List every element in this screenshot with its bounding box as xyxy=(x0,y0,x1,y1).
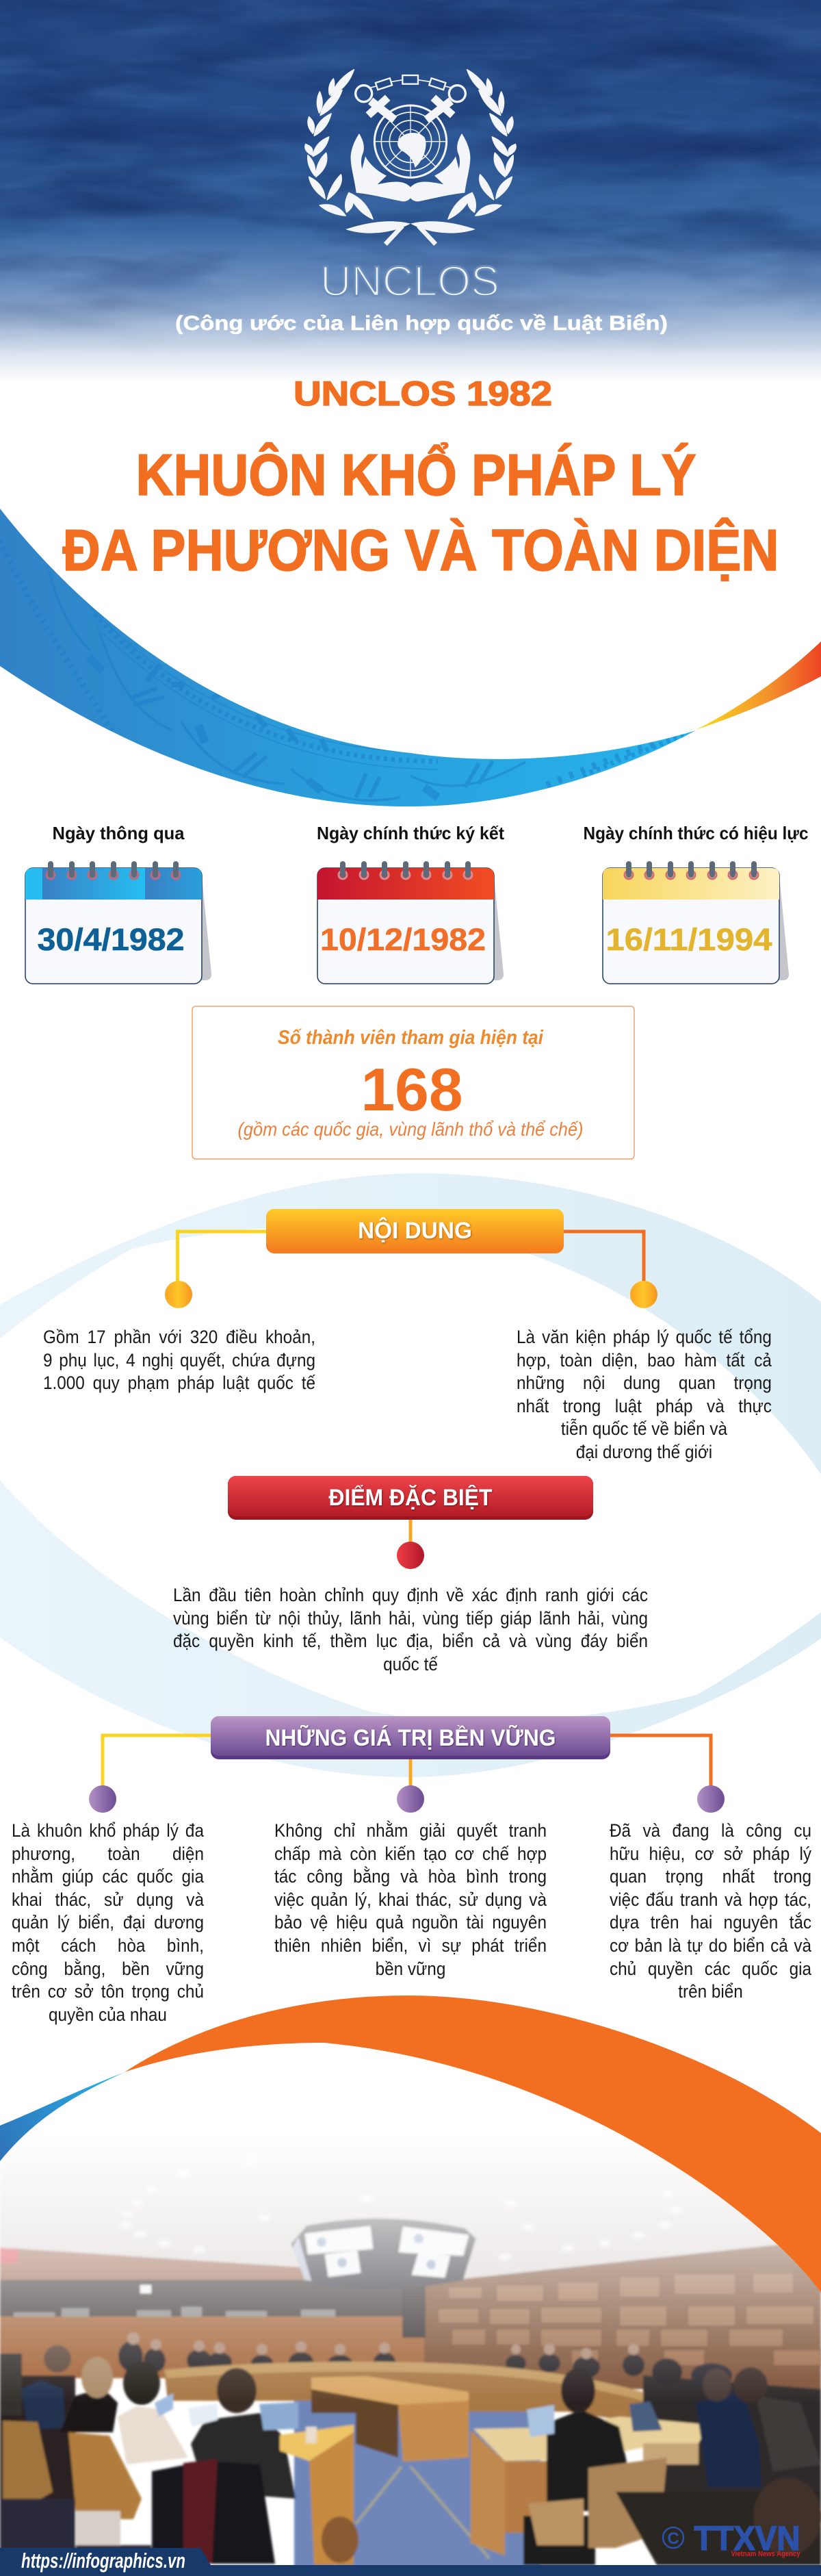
text block: value right: quan trọng nhất trong xyxy=(610,1866,811,1887)
text block: value left: công bằng, bền vững xyxy=(12,1959,204,1979)
text block: special point: vùng biển từ nội thủy, lãnh hải, vùng tiếp giáp lãnh hải, vùng xyxy=(173,1608,648,1629)
text block: value right: trên biển xyxy=(678,1981,743,2002)
text block: special point: đặc quyền kinh tế, thềm lục địa, biển cả và vùng đáy biển xyxy=(173,1631,648,1651)
text block: content right: nhất trong luật pháp và thực xyxy=(517,1396,772,1416)
text block: content left xyxy=(43,1327,315,1393)
copyright mark xyxy=(663,2527,683,2548)
text block: special point: Lần đầu tiên hoàn chỉnh quy định về xác định ranh giới các xyxy=(173,1585,648,1605)
panel: current membership xyxy=(192,1006,634,1159)
connector: values right xyxy=(608,1735,711,1790)
icon: anchor left half xyxy=(351,133,410,201)
logo: TTXVN: TTXVN xyxy=(694,2519,800,2558)
blue wave with Dong Son drum pattern xyxy=(0,509,696,806)
text block: value left xyxy=(12,1820,204,2025)
carpet xyxy=(294,2399,540,2567)
left front desk xyxy=(280,2425,359,2565)
text block: value left: trên cơ sở tôn trọng chủ xyxy=(12,1981,204,2002)
left delegates and chairs xyxy=(0,2345,188,2567)
blue arc tip xyxy=(0,2072,125,2161)
curved dais desk xyxy=(164,2362,657,2423)
text block: value left: Là khuôn khổ pháp lý đa xyxy=(12,1820,204,1841)
wave tail: yellow to red gradient xyxy=(696,641,821,730)
text block: content right: những nội dung quan trọng xyxy=(517,1373,772,1393)
text block: special point: quốc tế xyxy=(383,1654,438,1674)
text block: content right xyxy=(517,1327,772,1462)
text block: value left: quản lý biển, đại dương xyxy=(12,1912,204,1933)
left fascia and gallery xyxy=(0,2247,438,2317)
photo: meeting room with delegates xyxy=(0,2184,821,2565)
text block: content right: hợp, toàn diện, bao hàm tất cả xyxy=(517,1350,772,1370)
text block: value left: nhằm giúp các quốc gia xyxy=(12,1866,204,1887)
wood wall behind dais xyxy=(0,2317,445,2378)
right delegates, desk and chair xyxy=(471,2358,821,2565)
ceiling screens xyxy=(291,2218,476,2289)
text block: value right xyxy=(610,1820,811,2002)
membership caption: Số thành viên tham gia hiện tại xyxy=(278,1027,544,1049)
text block: content left: Gồm 17 phần với 320 điều khoản, xyxy=(43,1327,315,1347)
footer url: https://infographics.vn xyxy=(21,2549,185,2573)
ceiling lights xyxy=(122,2204,677,2260)
logo: UN maritime emblem with laurel wreath xyxy=(305,70,516,244)
text block: value right: Đã và đang là công cụ xyxy=(610,1820,811,1841)
calendar: 30/4/1982 xyxy=(25,864,211,984)
heading button: NHỮNG GIÁ TRỊ BỀN VỮNG xyxy=(211,1716,610,1759)
icon: ribbon xyxy=(346,221,475,244)
dot: values left xyxy=(89,1785,116,1813)
title line 1: KHUÔN KHỔ PHÁP LÝ xyxy=(135,442,696,508)
dot: values centre xyxy=(397,1785,424,1813)
icon: anchor right half xyxy=(410,133,470,201)
text block: value left: phương, toàn diện xyxy=(12,1844,204,1864)
heading button: NỘI DUNG xyxy=(266,1209,564,1253)
text block: value left: quyền của nhau xyxy=(49,2004,167,2025)
connector: values centre xyxy=(409,1756,412,1788)
icon: chain xyxy=(369,75,452,90)
text block: value centre: Không chỉ nhằm giải quyết tranh xyxy=(274,1820,547,1841)
text block: value right: cơ bản là tự do biển cả và xyxy=(610,1935,811,1956)
logo: TTXVN: Vietnam News Agency xyxy=(731,2550,800,2558)
right panelled wall xyxy=(424,2240,821,2389)
calendar: 16/11/1994: 16/11/1994 xyxy=(606,922,772,957)
footer bar xyxy=(0,2565,821,2576)
heading: UNCLOS 1982: UNCLOS 1982 xyxy=(294,374,552,413)
calendar: 10/12/1982: 10/12/1982 xyxy=(320,922,486,957)
text block: value centre: bền vững xyxy=(376,1959,445,1979)
icon: crossed anchor shanks and rings xyxy=(356,86,465,120)
copyright mark: C xyxy=(667,2529,679,2548)
orange arc xyxy=(125,1995,821,2293)
text block: value left: khai thác, sử dụng và xyxy=(12,1889,204,1910)
text block: value right: việc đấu tranh và hợp tác, xyxy=(610,1889,811,1910)
dot: values right xyxy=(697,1785,725,1813)
text block: value centre: thiên nhiên biển, vì sự phát triển xyxy=(274,1935,547,1956)
text block: value left: một cách hòa bình, xyxy=(12,1935,204,1956)
text block: value centre: việc quản lý, khai thác, sử dụng và xyxy=(274,1889,547,1910)
label: adoption date: Ngày thông qua xyxy=(52,823,185,843)
icon: UN globe xyxy=(374,105,447,177)
connector: content right xyxy=(561,1232,644,1287)
text block: value right: chủ quyền các quốc gia xyxy=(610,1959,811,1979)
membership note: (gồm các quốc gia, vùng lãnh thổ và thể chế) xyxy=(238,1119,583,1140)
connector: content left xyxy=(178,1232,268,1287)
calendar: 16/11/1994 xyxy=(603,864,789,984)
subtitle: (Công ước của Liên hợp quốc về Luật Biển) xyxy=(175,312,668,335)
connector: special point stem xyxy=(409,1516,412,1544)
logo wordmark: UNCLOS: UNCLOS xyxy=(320,258,499,305)
calendar: 30/4/1982: 30/4/1982 xyxy=(37,922,185,957)
icon: left laurel branch xyxy=(305,70,373,219)
text block: content left: 1.000 quy phạm pháp luật quốc tế xyxy=(43,1373,315,1393)
centre table xyxy=(311,2376,469,2462)
dot: content right xyxy=(630,1281,657,1308)
membership number: 168 xyxy=(361,1056,462,1123)
dot: content left xyxy=(165,1281,192,1308)
text block: content left: 9 phụ lục, 4 nghị quyết, chứa đựng xyxy=(43,1350,315,1370)
heading button: NỘI DUNG: NỘI DUNG xyxy=(358,1217,472,1244)
heading button: ĐIỂM ĐẶC BIỆT: ĐIỂM ĐẶC BIỆT xyxy=(328,1485,493,1511)
label: signing date: Ngày chính thức ký kết xyxy=(317,823,504,843)
background: ocean photo header xyxy=(0,0,821,383)
text block: value centre xyxy=(274,1820,547,1979)
background: pale blue bowl arc xyxy=(0,1480,821,1777)
text block: special point xyxy=(173,1585,648,1674)
connector: values left xyxy=(103,1735,213,1790)
text block: value centre: bảo vệ hiệu quả nguồn tài nguyên xyxy=(274,1912,547,1933)
text block: value centre: chấp mà còn kiến tạo cơ chế hợp xyxy=(274,1844,547,1864)
text block: value right: dựa trên hai nguyên tắc xyxy=(610,1912,811,1933)
heading button: NHỮNG GIÁ TRỊ BỀN VỮNG: NHỮNG GIÁ TRỊ BỀN VỮNG xyxy=(265,1725,556,1751)
text block: value right: hữu hiệu, cơ sở pháp lý xyxy=(610,1844,811,1864)
icon: right laurel branch xyxy=(448,70,516,219)
text block: content right: Là văn kiện pháp lý quốc tế tổng xyxy=(517,1327,772,1347)
front delegate and draped coat xyxy=(152,2368,298,2564)
calendar: 10/12/1982 xyxy=(317,864,504,984)
dais delegates xyxy=(118,2332,646,2378)
text block: content right: tiễn quốc tế về biển và xyxy=(561,1418,727,1439)
footer tab xyxy=(0,2548,211,2565)
dot: special point xyxy=(397,1542,424,1569)
text block: content right: đại dương thế giới xyxy=(576,1442,712,1462)
text block: value centre: tác công bằng và hòa bình trong xyxy=(274,1866,547,1887)
background: pale blue dome arc xyxy=(0,1173,821,1475)
label: entry into force date: Ngày chính thức có hiệu lực xyxy=(583,823,809,843)
heading button: ĐIỂM ĐẶC BIỆT xyxy=(228,1476,593,1520)
